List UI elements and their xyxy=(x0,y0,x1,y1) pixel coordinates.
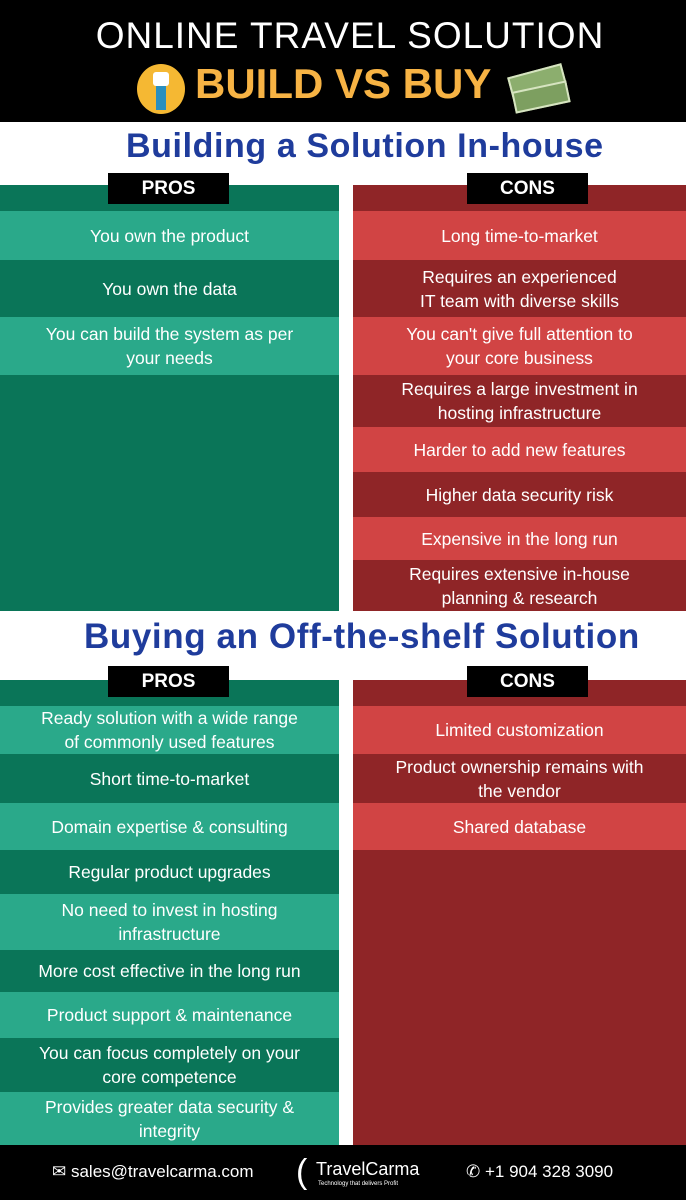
icon: build hand xyxy=(137,64,185,114)
panel: build pros: You can build the system as per xyxy=(46,324,293,344)
panel: buy cons xyxy=(353,680,686,1145)
panel: build cons: Expensive in the long run xyxy=(421,528,618,548)
logo: ( xyxy=(296,1153,307,1191)
panel: buy pros: Short time-to-market xyxy=(90,768,249,788)
panel: build cons: Harder to add new features xyxy=(413,440,626,460)
panel: buy pros: infrastructure xyxy=(118,924,221,944)
title: ONLINE TRAVEL SOLUTION xyxy=(96,15,604,56)
panel: build pros: You own the product xyxy=(90,226,249,246)
tag: cons 2 xyxy=(467,666,588,697)
panel: buy cons: Product ownership remains with xyxy=(395,756,644,776)
panel: buy pros: No need to invest in hosting xyxy=(62,900,277,920)
heading: buying: Buying an Off-the-shelf Solution xyxy=(84,617,640,656)
tag: cons 1 xyxy=(467,173,588,204)
panel: build cons: You can't give full attention to xyxy=(406,324,633,344)
panel: build cons: Requires an experienced xyxy=(422,266,617,286)
panel: buy cons: Shared database xyxy=(453,816,586,836)
panel: buy pros: Domain expertise & consulting xyxy=(51,816,288,836)
panel: build pros: your needs xyxy=(126,348,213,368)
header xyxy=(0,0,686,122)
panel: buy pros: core competence xyxy=(102,1067,237,1087)
panel: build pros xyxy=(0,185,339,611)
panel: buy cons: the vendor xyxy=(478,780,561,800)
tag: pros 2: PROS xyxy=(142,670,195,692)
tag: pros 1: PROS xyxy=(142,178,195,198)
footer xyxy=(0,1145,686,1200)
logo xyxy=(296,1153,420,1191)
panel: buy pros: Ready solution with a wide range xyxy=(41,708,298,728)
panel: buy pros: You can focus completely on your xyxy=(39,1043,300,1063)
tag: cons 1: CONS xyxy=(500,178,555,198)
tag: pros 1 xyxy=(108,173,229,204)
panel: buy pros xyxy=(0,680,339,1145)
icon: money xyxy=(507,63,571,114)
panel: build cons: Requires extensive in-house xyxy=(409,564,630,584)
panel: build cons: hosting infrastructure xyxy=(438,403,601,423)
panel: build cons: Higher data security risk xyxy=(426,484,613,504)
panel: buy cons: Limited customization xyxy=(435,720,604,740)
panel: build cons: planning & research xyxy=(442,588,597,608)
panel: buy pros: Product support & maintenance xyxy=(47,1005,292,1025)
subtitle: BUILD VS BUY xyxy=(195,60,491,107)
panel: build cons: your core business xyxy=(446,348,593,368)
tag: pros 2 xyxy=(108,666,229,697)
heading: building: Building a Solution In-house xyxy=(126,127,604,165)
panel: build pros: You own the data xyxy=(102,278,237,298)
panel: buy pros: Provides greater data security & xyxy=(45,1096,294,1116)
panel: build cons: IT team with diverse skills xyxy=(420,290,619,310)
panel: buy pros: integrity xyxy=(139,1120,200,1140)
panel: buy pros: of commonly used features xyxy=(64,732,275,752)
logo: Technology that delivers Profit xyxy=(318,1181,398,1187)
panel: build cons xyxy=(353,185,686,611)
panel: buy pros: More cost effective in the long run xyxy=(38,961,301,981)
email: ✉ sales@travelcarma.com xyxy=(52,1162,254,1181)
panel: build cons: Requires a large investment in xyxy=(401,379,638,399)
panel: buy pros: Regular product upgrades xyxy=(68,862,271,882)
panel: build cons: Long time-to-market xyxy=(441,226,598,246)
tag: cons 2: CONS xyxy=(500,670,555,692)
phone: ✆ +1 904 328 3090 xyxy=(466,1162,613,1181)
logo: TravelCarma xyxy=(316,1159,419,1179)
